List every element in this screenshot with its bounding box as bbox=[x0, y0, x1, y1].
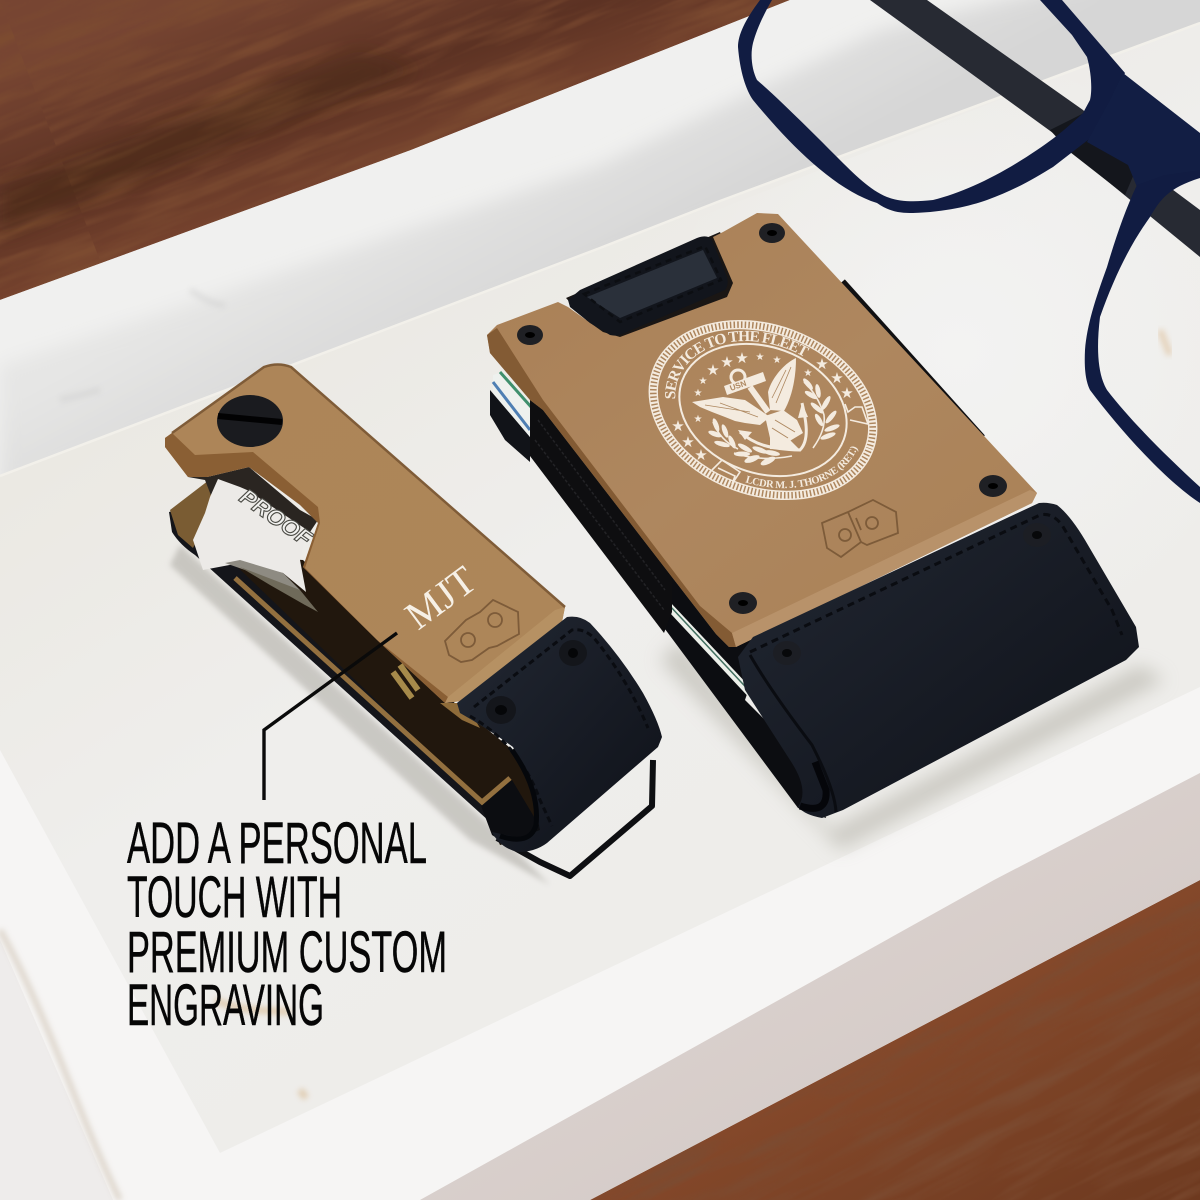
metal keys: PROOF bbox=[235, 484, 317, 551]
left wing bbox=[692, 397, 770, 425]
under-head shadow bbox=[188, 467, 318, 532]
key organizer copper arm bbox=[165, 364, 565, 703]
callout text: ENGRAVING bbox=[127, 973, 324, 1038]
key organizer bbox=[165, 364, 662, 885]
laurel branches bbox=[708, 377, 840, 467]
right wing bbox=[768, 358, 796, 411]
callout text: ADD A PERSONAL bbox=[127, 811, 427, 876]
seal text: LCDR M. J. THORNE (RET.) bbox=[745, 446, 858, 488]
tray left rim bbox=[0, 750, 225, 1200]
plate bevels bbox=[487, 328, 1037, 647]
tray corner outer marble bbox=[0, 940, 113, 1200]
engraved seal: service to the fleet bbox=[648, 320, 878, 500]
glasses temple arm bbox=[870, 0, 1200, 257]
leather strap bbox=[457, 617, 662, 852]
seal stars: ★ bbox=[699, 376, 708, 387]
copper stripe bbox=[235, 578, 510, 802]
anchor bbox=[724, 370, 808, 450]
seal stars: ★ bbox=[830, 369, 844, 387]
seal stars: ★ bbox=[773, 355, 782, 366]
flat head screw bbox=[217, 395, 283, 447]
seal stars: ★ bbox=[694, 388, 703, 399]
tray front rim: side face bbox=[420, 773, 1200, 1200]
seal stars: ★ bbox=[681, 433, 695, 451]
plate screws bbox=[517, 223, 1007, 614]
pull tab leather bbox=[568, 236, 728, 336]
left lens frame bbox=[738, 0, 1125, 213]
seal stars: ★ bbox=[756, 352, 765, 363]
callout leader line bbox=[264, 633, 397, 800]
right lens frame bbox=[1085, 170, 1200, 503]
engraved logo: wallet bbox=[822, 500, 898, 557]
callout text bbox=[127, 811, 447, 1038]
strap rivets bbox=[773, 523, 1051, 665]
seal stars: ★ bbox=[671, 417, 685, 435]
elastic behind plate edge bbox=[843, 281, 983, 437]
engraved monogram: MJT bbox=[397, 557, 484, 638]
card stack bbox=[490, 372, 826, 818]
body and tail bbox=[765, 410, 803, 442]
left laurel upper sprig bbox=[708, 418, 738, 449]
copper corner bbox=[170, 477, 222, 548]
seal stars: ★ bbox=[840, 384, 854, 402]
metal keys bbox=[193, 479, 418, 698]
seal stars: ★ bbox=[720, 353, 734, 371]
copper plate bbox=[487, 213, 1037, 647]
ribbon ends bbox=[712, 404, 868, 484]
left laurel lower sprig bbox=[734, 442, 792, 467]
wallet shadow bbox=[660, 640, 1165, 850]
arm bevels bbox=[165, 364, 565, 703]
leather money strap bbox=[738, 503, 1139, 818]
strap rivets bbox=[486, 640, 587, 724]
key organizer shadow bbox=[170, 545, 550, 885]
floor seam line bbox=[0, 23, 1200, 476]
engraved logo: key organizer bbox=[445, 600, 519, 662]
black strap inside bbox=[480, 780, 545, 850]
seal stars bbox=[671, 349, 854, 464]
seal stars: ★ bbox=[694, 446, 708, 464]
seal stars: ★ bbox=[694, 414, 703, 425]
dark interior bbox=[225, 555, 545, 845]
black lower layer bbox=[169, 505, 505, 822]
tray back rim: inner wall bbox=[0, 0, 1200, 495]
tray back rim: top face bbox=[0, 0, 1200, 475]
seal stars: ★ bbox=[815, 355, 829, 373]
seal stars: ★ bbox=[706, 361, 720, 379]
callout text: TOUCH WITH bbox=[127, 865, 342, 930]
seal stars: ★ bbox=[804, 368, 813, 379]
callout text: PREMIUM CUSTOM bbox=[127, 920, 447, 985]
anchor: USN bbox=[729, 379, 748, 393]
pull tab notch shadow bbox=[566, 232, 740, 342]
seal stars: ★ bbox=[735, 349, 749, 367]
eyeglasses bbox=[738, 0, 1200, 503]
card wallet bbox=[487, 213, 1162, 852]
right laurel bbox=[802, 377, 840, 448]
seal text bbox=[665, 330, 858, 488]
eagle bbox=[692, 358, 803, 442]
tray front rim: top face bbox=[220, 687, 1200, 1200]
back plate bbox=[169, 477, 545, 850]
bridge and hinge bbox=[1087, 73, 1200, 187]
marble veins and spots bbox=[0, 930, 120, 1200]
seal rings bbox=[624, 290, 902, 530]
seal text: SERVICE TO THE FLEET bbox=[665, 330, 810, 398]
metal loop bbox=[497, 760, 653, 876]
elastic band bbox=[530, 400, 672, 633]
